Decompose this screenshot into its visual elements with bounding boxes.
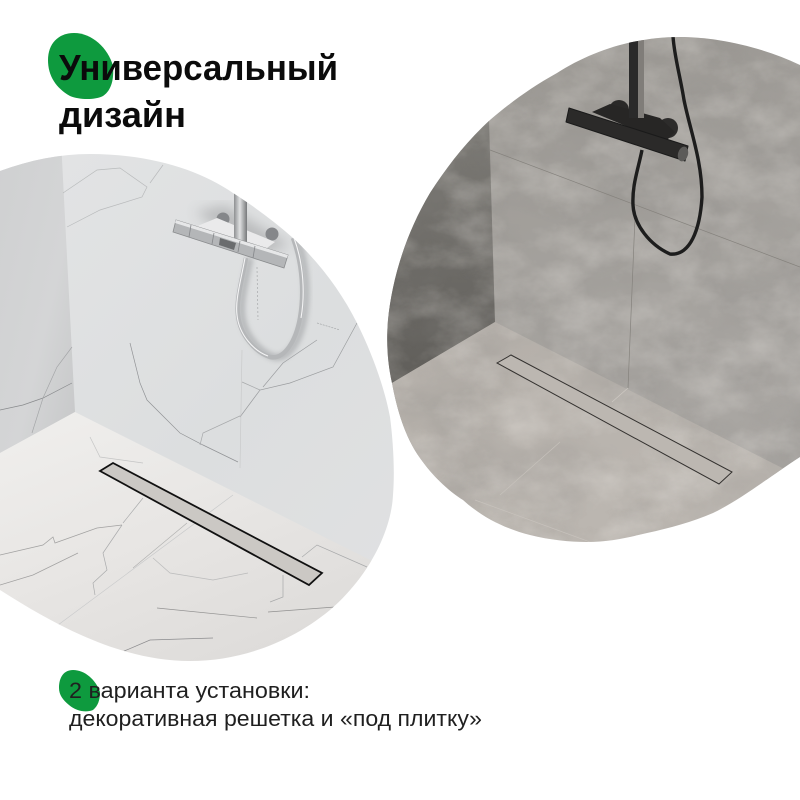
wall mounts bbox=[610, 100, 629, 110]
riser pipe bbox=[234, 194, 247, 242]
tile seams bbox=[475, 150, 800, 542]
wall mounts bbox=[216, 212, 230, 223]
bar end cap bbox=[678, 146, 688, 162]
mixer bar bbox=[566, 108, 688, 161]
tile seams bbox=[58, 350, 242, 625]
drain: decorative grate bbox=[100, 463, 322, 585]
dark control window bbox=[219, 238, 236, 250]
photo: white marble shower bbox=[0, 140, 400, 680]
shadow bbox=[195, 205, 290, 255]
pipe reflection bbox=[638, 40, 644, 118]
concrete texture light bbox=[380, 30, 800, 550]
caption line two: декоративная решетка и «под плитку» bbox=[69, 706, 482, 731]
marble left wall bbox=[0, 140, 75, 453]
concrete floor bbox=[392, 322, 782, 542]
chrome hose bbox=[238, 238, 302, 357]
bar highlight bbox=[175, 220, 288, 258]
chrome shower mixer bbox=[173, 190, 306, 357]
marble veins bbox=[0, 165, 367, 652]
concrete back wall bbox=[380, 30, 800, 480]
drain: under-tile bbox=[497, 355, 732, 484]
black shower mixer bbox=[566, 36, 702, 254]
caption line one: 2 варианта установки: bbox=[69, 678, 310, 703]
valve top plate bbox=[195, 218, 275, 248]
concrete texture dark bbox=[418, 347, 800, 516]
black hose bbox=[633, 36, 702, 254]
marble back wall bbox=[13, 154, 394, 561]
concrete left wall bbox=[387, 121, 495, 383]
title: Универсальный bbox=[59, 47, 338, 88]
hose shadow bbox=[242, 238, 306, 357]
title second line: дизайн bbox=[59, 94, 186, 135]
green blob: text accent bbox=[59, 670, 100, 711]
green blob: title accent bbox=[48, 33, 113, 99]
valve top plate bbox=[592, 104, 670, 139]
riser pipe bbox=[629, 40, 638, 118]
photo: grey concrete shower bbox=[380, 30, 800, 560]
marble floor bbox=[0, 412, 370, 661]
mixer bar bbox=[173, 220, 288, 268]
bar segments bbox=[189, 225, 255, 258]
